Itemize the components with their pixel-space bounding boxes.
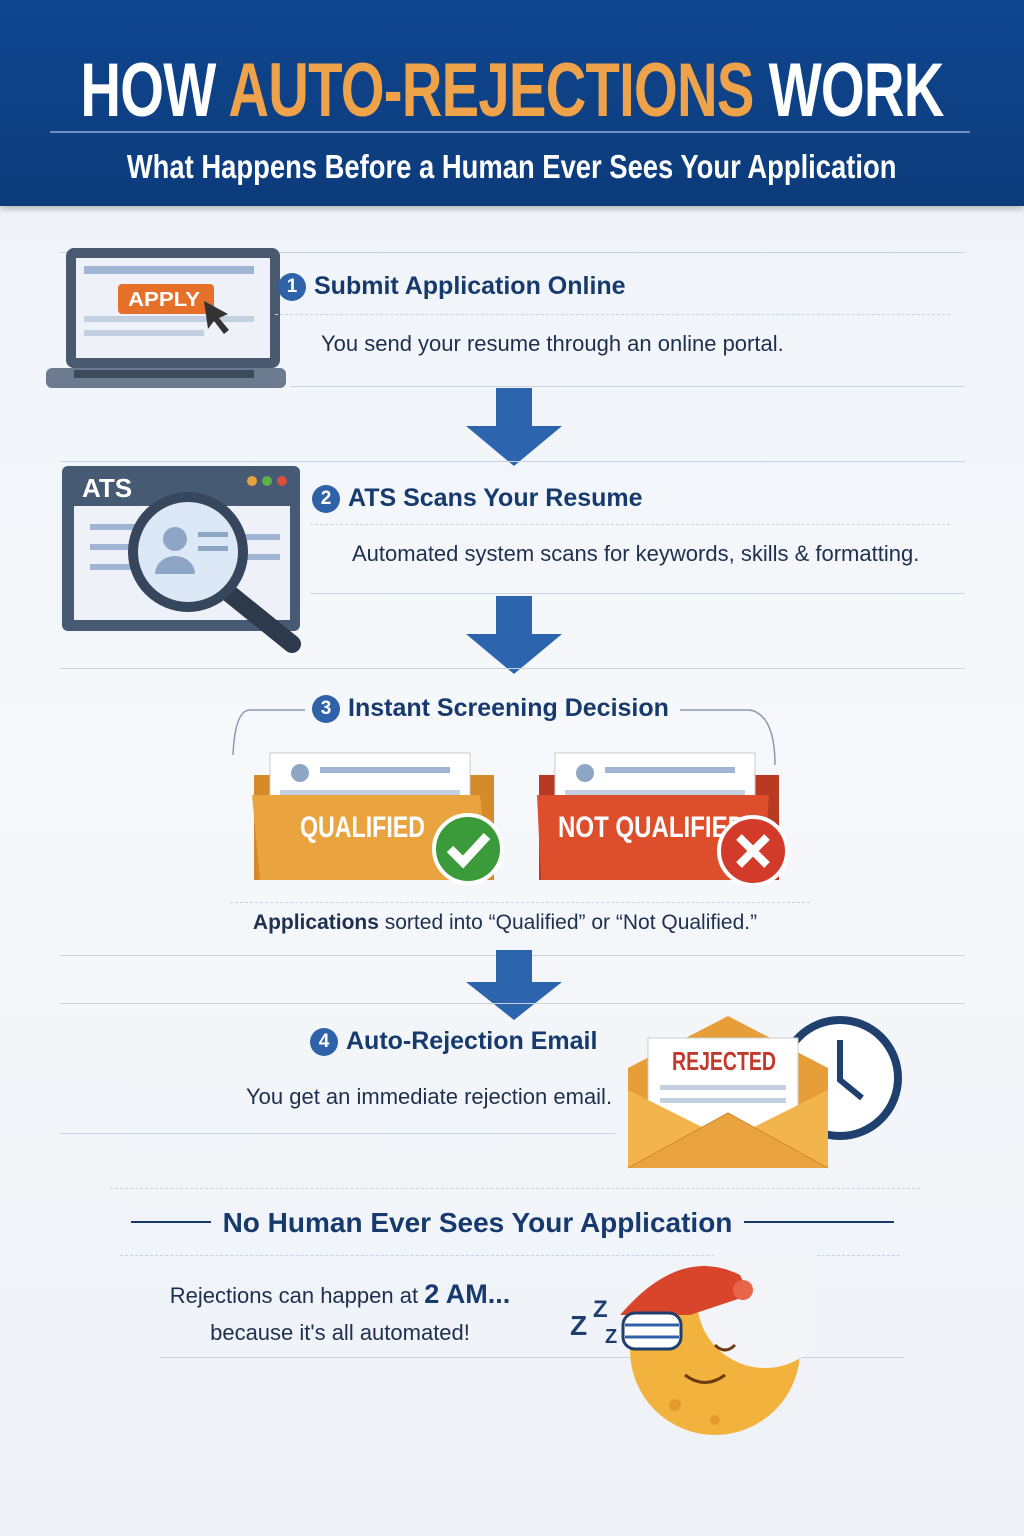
conclusion text: Rejections can happen at 2 AM... <box>170 1279 510 1309</box>
step 1: 1 <box>287 276 297 297</box>
step 1 <box>278 272 784 356</box>
icon: ATS screen <box>62 466 301 653</box>
step 3 text: Applications sorted into “Qualified” or “Not Qualified.” <box>253 911 757 934</box>
step 2: Automated system scans for keywords, skills & formatting. <box>352 541 919 566</box>
subtitle: What Happens Before a Human Ever Sees Your Application <box>127 148 897 185</box>
icon: sleeping moon: Z <box>605 1326 617 1348</box>
header <box>0 0 1024 206</box>
conclusion heading: No Human Ever Sees Your Application <box>223 1207 732 1238</box>
arrow 3 <box>466 950 562 1020</box>
icon: laptop <box>46 248 286 388</box>
step 2 <box>312 484 919 566</box>
arrow 1 <box>466 388 562 466</box>
icon: sleeping moon: Z <box>593 1296 608 1323</box>
step 2: ATS Scans Your Resume <box>348 484 643 512</box>
icon: ATS screen: ATS <box>82 473 132 503</box>
conclusion text <box>170 1279 510 1345</box>
step 3 heading: Instant Screening Decision <box>348 694 669 722</box>
step 4: Auto-Rejection Email <box>346 1027 597 1055</box>
icon: sleeping moon: Z <box>570 1310 587 1341</box>
step 4: 4 <box>319 1031 329 1052</box>
step 4 <box>246 1027 612 1109</box>
folder: not qualified <box>537 752 789 885</box>
step 1: Submit Application Online <box>314 272 626 300</box>
title: HOW AUTO-REJECTIONS WORK <box>80 48 944 133</box>
folder: not qualified: NOT QUALIFIED <box>558 811 745 844</box>
step 3 heading: 3 <box>321 698 331 719</box>
step 4: You get an immediate rejection email. <box>246 1084 612 1109</box>
conclusion text: because it's all automated! <box>210 1320 470 1345</box>
step 1: You send your resume through an online portal. <box>321 331 784 356</box>
icon: laptop: APPLY <box>128 289 201 311</box>
folder: qualified: QUALIFIED <box>300 811 425 844</box>
icon: envelope and clock <box>628 1016 902 1168</box>
arrow 2 <box>466 596 562 674</box>
icon: envelope and clock: REJECTED <box>672 1046 776 1076</box>
folder: qualified <box>252 752 504 885</box>
icon: sleeping moon <box>570 1255 815 1435</box>
step 2: 2 <box>321 488 331 509</box>
